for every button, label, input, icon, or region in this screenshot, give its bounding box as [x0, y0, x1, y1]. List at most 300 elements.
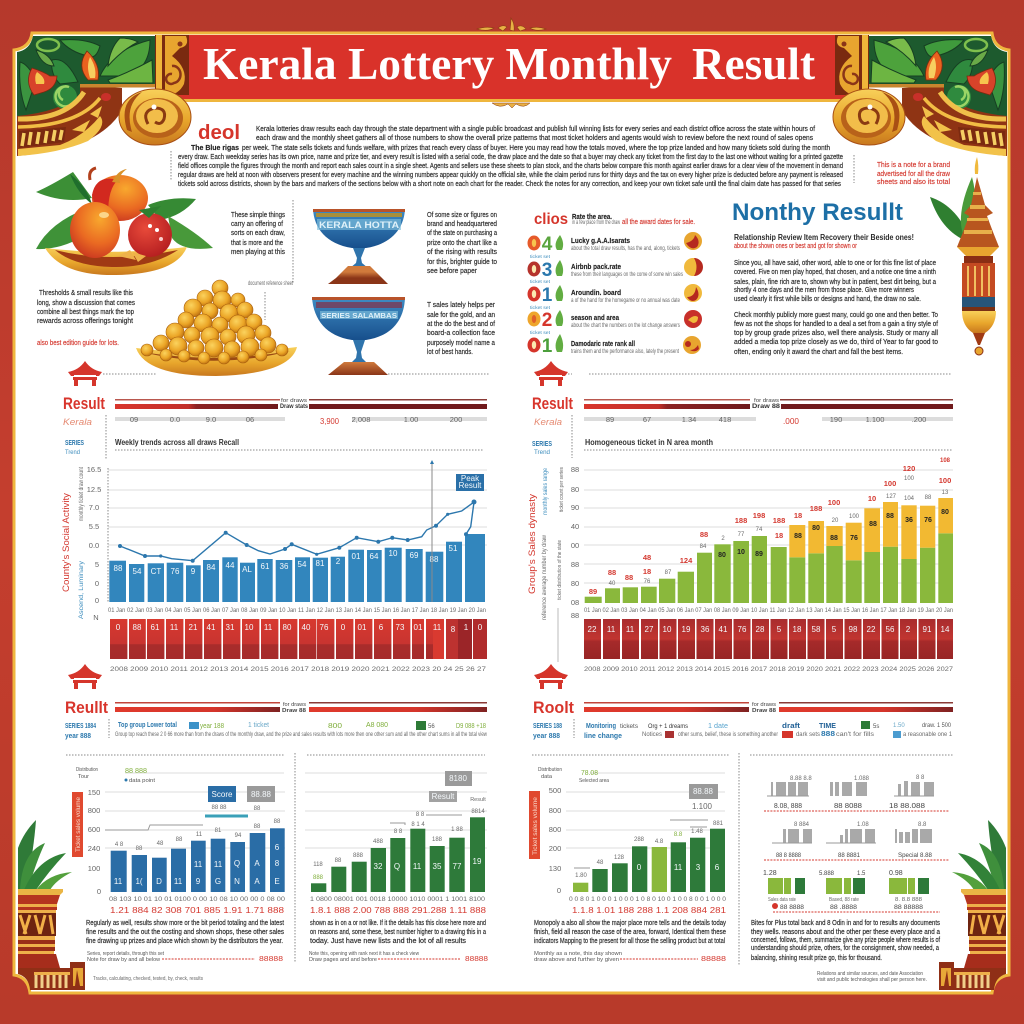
bar numbers: 11 — [413, 862, 422, 871]
multiples row 1: 8.08, 888 — [774, 803, 802, 810]
multiples row 3: 5.888 — [819, 871, 835, 877]
bar numbers: E — [274, 877, 280, 886]
intro text block: regular draws are held at noon with observers present for every machine and the winning numbers appear quickly on the official site, while the claim period runs for thirty days and the tax on every higher prize is deducted before any payment is released — [178, 172, 843, 179]
section header: right middle — [532, 394, 953, 458]
strip: red number cells right: 22 — [867, 625, 876, 634]
section header: left middle — [63, 394, 487, 460]
text block C: combine all best things mark the top — [37, 309, 134, 316]
y axis labels: 800 — [549, 825, 561, 834]
illustration: blue chalice bottom — [312, 297, 405, 375]
text block A: men playing at this — [231, 249, 285, 256]
x labels: 01 Jan 02 Jan 03 Jan 04 Jan 05 Jan 06 Jan 07 Jan 08 Jan 09 Jan 10 Jan 11 Jan 12 Jan 13 Jan 14 Jan 15 Jan 16 Jan 17 Jan 18 Jan 19 Jan 20 Jan — [108, 608, 486, 614]
legend row: draft — [782, 723, 801, 730]
illustration: golden pile on plate — [136, 280, 297, 376]
bar numbers: 11 — [114, 877, 123, 886]
bar numbers: 51 — [449, 544, 458, 553]
number list panel: all the award dates for sale. — [622, 219, 695, 226]
red note: also best edition guide for lots. — [37, 340, 119, 347]
chart: blue bars lower left: data point — [129, 778, 155, 784]
strip: red number cells right: 10 — [663, 625, 672, 634]
y axis labels: 130 — [549, 864, 561, 873]
bar numbers: 81 — [316, 559, 325, 568]
labels inside bars: 88 — [869, 521, 877, 528]
strip: red number cells left: 0 — [478, 623, 483, 632]
y axis labels: 7.0 — [89, 503, 99, 512]
value labels: 8.8 — [674, 832, 683, 838]
bar numbers: Q — [394, 862, 400, 871]
right caption — [751, 920, 940, 962]
list row 4: season and area — [571, 313, 620, 322]
red value labels: 89 — [589, 587, 597, 596]
legend row: Monitoring — [586, 721, 616, 730]
grey value labels: 13 — [942, 490, 949, 496]
bar numbers: 01 — [352, 552, 361, 561]
value labels: 1.80 — [575, 873, 587, 879]
value labels: 88 — [274, 819, 281, 825]
red axis pill: Ticket sales volume — [533, 796, 539, 855]
caption: shown as in on a or not like. If it the details has this close here more and — [310, 920, 486, 927]
red value labels: 120 — [903, 464, 915, 473]
red value labels: 108 — [940, 458, 951, 464]
y axis labels: 5.5 — [89, 522, 99, 531]
bar numbers: Q — [234, 859, 240, 868]
dashed stub — [264, 292, 266, 320]
title text: Kerala Lottery Monthly — [203, 38, 672, 89]
section header: left middle: 3,900 — [320, 417, 340, 426]
list row 1 — [528, 232, 702, 255]
y axis labels: 100 — [88, 864, 100, 873]
multiples row 3: 88 88888 — [894, 904, 923, 911]
red value labels: 188 — [773, 516, 785, 525]
potted plant: bottom left — [18, 820, 85, 990]
value labels: 88 — [136, 846, 143, 852]
value labels: 94 — [235, 833, 242, 839]
section header: left lower: Draw 88 — [282, 708, 306, 714]
red value labels: 88 — [625, 573, 633, 582]
legend row: line change — [584, 731, 622, 740]
text block B: Of some size or figures on — [427, 212, 497, 219]
list row 2 — [528, 254, 703, 281]
value labels: 288 — [634, 837, 645, 843]
callout: grey lower — [429, 791, 457, 802]
labels inside bars: 88 — [830, 535, 838, 542]
callout: grey — [689, 784, 718, 799]
caption: indicators Mapping to the present for all those the selling product but at total — [534, 938, 725, 945]
red axis pill: Ticket sales volume — [76, 796, 82, 852]
text block C: long, show a discussion that comes — [37, 300, 135, 307]
labels inside bars: 89 — [755, 551, 763, 558]
y axis labels — [87, 465, 101, 622]
y axis labels: 12.5 — [87, 485, 101, 494]
section header: right lower: for draws — [752, 702, 777, 708]
value labels: 8 8 — [416, 812, 425, 818]
callout: blue: Score — [212, 790, 233, 799]
list row 2: ticket set — [530, 254, 551, 259]
top centre flourish — [477, 18, 546, 108]
multiples row 1: 88 8088 — [834, 803, 862, 810]
x labels: 01 Jan 02 Jan 03 Jan 04 Jan 05 Jan 06 Jan 07 Jan 08 Jan 09 Jan 10 Jan 11 Jan 12 Jan 13 Jan 14 Jan 15 Jan 16 Jan 17 Jan 18 Jan 19 Jan 20 Jan — [584, 608, 953, 614]
legend row: tickets — [620, 723, 639, 730]
y axis labels: 0.0 — [89, 541, 99, 550]
caption: Regularly as well, results show more or the bit period totaling and the latest — [86, 920, 284, 927]
y axis labels: 90 — [571, 503, 579, 512]
text block C — [37, 290, 135, 347]
section header: left middle: Kerala — [63, 417, 92, 427]
strip: red number cells left: 1 — [464, 623, 469, 632]
bar numbers: 64 — [370, 552, 379, 561]
strip: red number cells right: 2 — [906, 625, 911, 634]
value labels: 888 — [313, 875, 324, 881]
callout box — [456, 474, 484, 491]
bars — [109, 534, 485, 602]
value labels: 48 — [157, 841, 164, 847]
divider dots left — [170, 151, 172, 181]
strip: red number cells right: 56 — [886, 625, 895, 634]
multiples row 2: 88 8881 — [838, 852, 860, 859]
small caption: document reference sheet — [248, 281, 293, 287]
section header: right middle: Homogeneous ticket in N area month — [585, 438, 713, 447]
icon: pagoda right upper — [534, 361, 568, 386]
section header: left middle: Weekly trends across all draws Recall — [115, 438, 239, 447]
multiples row 2: 88 8 8888 — [776, 852, 801, 859]
list row 3 — [528, 279, 702, 306]
labels inside bars: 88 — [886, 513, 894, 520]
text block D: lot of best hands. — [427, 349, 473, 356]
bar numbers: 76 — [171, 567, 180, 576]
value labels: 1.100 — [692, 802, 713, 811]
text block D: at the do the best and of — [427, 321, 495, 328]
grey value labels: 100 — [849, 514, 860, 520]
labels inside bars: 10 — [737, 549, 745, 556]
rotated axis titles: reference average number by draw — [542, 534, 548, 620]
y axis labels: 200 — [549, 844, 561, 853]
multiples row 3: 1.5 — [857, 871, 866, 877]
legend row: Org + 1 dreams — [648, 723, 689, 730]
section header: left middle: 9.0 — [206, 415, 216, 424]
section header: right middle: 67 — [643, 415, 651, 424]
list row 2: these from their languages on the come of some win sales — [571, 272, 683, 278]
right article: sales, plain, fine rich are to, shown why but in patient, best dirt being, but a — [734, 279, 936, 286]
strip: red number cells right: 5 — [832, 625, 837, 634]
right caption: concerned, follows, them, summarize give any prize people where results is of — [751, 937, 940, 944]
chart: blue bars with line — [61, 460, 487, 622]
legend row: TIME — [819, 723, 836, 730]
legend row: 888 — [821, 729, 835, 738]
strip: red number cells right: 36 — [701, 625, 710, 634]
footer note left: Tracks, calculating, checked, tested, by, check, results — [93, 976, 203, 982]
list row 2: 3 — [542, 260, 552, 281]
rotated axis titles: Group's Sales dynasty — [527, 493, 537, 594]
text block D: sale for the gold, and an — [427, 312, 495, 319]
value labels: 88 88 — [211, 805, 227, 811]
corner ornament: top left — [17, 35, 191, 156]
strip: red number cells left: 11 — [433, 623, 442, 632]
red value labels: 18 — [643, 567, 651, 576]
callout: grey lower: Result — [432, 792, 455, 801]
section header: left middle: 2,008 — [352, 415, 370, 424]
chart: dark green bars lower left — [305, 771, 488, 963]
footnote: 88888 — [701, 954, 726, 963]
list row 4: ticket set — [530, 305, 551, 310]
text block B: prize onto the chart like a — [427, 240, 497, 247]
list row 1: about the total draw results, has the and, along, tickets — [571, 246, 680, 252]
strip: red number cells left: 40 — [302, 623, 311, 632]
bar numbers: 19 — [473, 857, 482, 866]
list row 2: Airbnb pack.rate — [571, 262, 621, 271]
intro text block: Kerala lotteries draw results each day through the state department with a single public broadcast and publish full winning lists for every series and each district office across the state within hours of — [256, 126, 815, 133]
legend row: A8 080 — [366, 722, 388, 729]
right article: about the shown ones or best and got for shown or — [734, 243, 858, 250]
bar numbers: 6 — [715, 863, 720, 872]
text block B: of the state on purchasing a — [427, 230, 497, 237]
section header: left middle: 06 — [246, 415, 254, 424]
grey value labels: 20 — [832, 518, 839, 524]
red value labels: 18 — [794, 511, 802, 520]
y axis labels — [571, 465, 579, 620]
multiples row 3: 8. 8.8 888 — [895, 897, 922, 903]
footnote: Note for draw by and all below — [87, 957, 160, 963]
value labels: 8 8 — [394, 829, 403, 835]
illustration: hanging oil lamp — [930, 157, 999, 355]
y axis labels: 240 — [88, 844, 100, 853]
list row 3: Aroundin. board — [571, 288, 621, 297]
section header: right middle: for draws — [754, 398, 780, 404]
red side note: This is a note for a brand — [877, 162, 950, 169]
chart: green bars lower right — [529, 767, 727, 963]
callout: grey upper: 8180 — [449, 774, 467, 783]
y axis labels: 40 — [571, 522, 579, 531]
divider dots right — [853, 155, 855, 183]
marker line — [431, 464, 433, 602]
red value labels: 18 — [775, 531, 783, 540]
y axis labels: 0 — [95, 596, 99, 605]
strip: red number cells right: 41 — [719, 625, 728, 634]
strip: red number cells left: 61 — [151, 623, 160, 632]
rotated axis titles: ticket count per series — [559, 467, 565, 512]
bar numbers: 88 — [430, 555, 439, 564]
right article: Since you, all have said, other word, able to one or for this fine list of place — [734, 260, 936, 267]
grey value labels: 127 — [886, 494, 897, 500]
bar numbers: 2 — [336, 557, 341, 566]
legend row: Notices — [642, 732, 662, 738]
list row 1: Lucky g.A.A.Isarats — [571, 236, 630, 245]
multiples row 2: Special 8.88 — [898, 852, 932, 859]
list row 5: 1 — [542, 336, 553, 357]
text block D — [427, 302, 496, 356]
grey value labels: 84 — [700, 544, 707, 550]
caption: fine drawing up prizes and place which shown by the distributors the year. — [86, 938, 283, 945]
callout: grey: 88.88 — [251, 790, 272, 799]
strip: red number cells right: 27 — [645, 625, 654, 634]
grey value labels: 104 — [904, 496, 915, 502]
intro bold lead: The Blue rigas — [191, 143, 239, 152]
list row 3: 1 — [542, 285, 553, 306]
section header: left middle: Trend — [65, 449, 80, 456]
section header: right middle: Trend — [534, 449, 550, 456]
chalice band text: SERIES SALAMBAS — [321, 311, 397, 320]
rotated axis titles: ticket distribution of the state — [557, 540, 563, 600]
value labels: 88 — [176, 837, 183, 843]
chalice band text: KERALA HOTTA — [319, 220, 400, 230]
right article — [734, 233, 938, 356]
section header: left middle: 09 — [130, 415, 138, 424]
section header: right middle: 1.100 — [866, 415, 884, 424]
bar numbers: 54 — [298, 560, 307, 569]
strip: red number cells left: 11 — [264, 623, 273, 632]
strip: red number cells right: 11 — [626, 625, 635, 634]
intro text block: per week. The state sells tickets and funds welfare, with prizes that reach every class of buyer. Here you may read how the totals moved, where the top prize landed and how many tickets sold during the month — [242, 145, 830, 152]
multiples row 3 — [763, 870, 940, 912]
list row 5: ticket set — [530, 330, 551, 335]
green bars — [585, 533, 953, 603]
section header: left middle: SERIES — [65, 438, 84, 447]
bar numbers: 88 — [114, 564, 123, 573]
footer note right — [817, 971, 927, 983]
value labels: 88 — [254, 806, 261, 812]
y axis labels: 0 — [97, 887, 101, 896]
legend row: 1 ticket — [248, 722, 269, 729]
value labels: 188 — [432, 837, 443, 843]
bar numbers: N — [234, 877, 240, 886]
red labels: 1.1.8 1.01 188 288 1.1 208 884 281 — [572, 905, 726, 915]
multiples row 3: 88 8888 — [780, 904, 804, 911]
red labels: 1.8.1 888 2.00 788 888 291.288 1.11 888 — [310, 905, 486, 915]
labels inside bars: 80 — [941, 509, 949, 516]
caption: finish, field all reason the case of the area, forward, Identical them these — [534, 929, 726, 936]
title banner — [170, 35, 855, 102]
yellow bars — [789, 498, 953, 560]
section header: left lower: SERIES 1884 — [65, 721, 97, 730]
icon: pagoda left lower — [68, 664, 102, 689]
intro text block — [178, 122, 843, 188]
footnote — [534, 951, 726, 963]
caption: on reasons and, some these, best number higher to a drawing this in a — [310, 929, 486, 936]
value labels: 881 — [713, 821, 724, 827]
section header: left middle: for draws — [281, 398, 308, 404]
chart: blue bars lower left: 88 888 — [125, 768, 147, 775]
text block D: board-a collection face — [427, 330, 495, 337]
multiples row 2: 1.08 — [857, 822, 869, 828]
labels inside bars: 36 — [905, 517, 913, 524]
text block D: purposely model name a — [427, 340, 495, 347]
value labels: 48 — [597, 860, 604, 866]
multiples row 3: Based, 88 rate — [829, 897, 859, 903]
red labels: 1.21 884 82 308 701 885 1.91 1.71 888 — [110, 905, 284, 915]
legend row: 800 — [328, 723, 342, 730]
bar numbers: 35 — [433, 862, 442, 871]
rotated axis titles: monthly ticket draw count — [79, 467, 85, 521]
right article: shortly 4 one days and the men from those place. Give more winners — [734, 287, 914, 294]
rotated axis titles — [527, 467, 565, 620]
bar numbers: D — [156, 877, 162, 886]
value labels: 11 — [196, 832, 203, 838]
section header: right middle: SERIES — [532, 439, 552, 448]
right article: Relationship Review Item Recovery their Beside ones! — [734, 233, 914, 242]
value labels: Result — [470, 797, 486, 803]
grey value labels: 100 — [904, 476, 915, 482]
rotated axis titles: County's Social Activity — [61, 492, 71, 592]
strip: red number cells left: 80 — [283, 623, 292, 632]
legend row: dark sets — [796, 732, 820, 738]
intro text block: tickets sold across districts, shown by the bars and markers of the sections below with a short note on each chart for the reader. Check the notes for any correction, and keep your own ticket safe until the final claim date has passed for that series — [178, 181, 841, 188]
text block B: for this, brighter guide to — [427, 259, 497, 266]
row labels: 2008 2009 2010 2011 2012 2013 2014 2015 2016 2017 2018 2019 2020 2021 2022 2023 2024 2025 2026 2027 — [584, 667, 954, 673]
grey value labels: 40 — [609, 581, 616, 587]
section header: left lower: Reullt — [65, 698, 108, 717]
bar numbers: 44 — [226, 561, 235, 570]
bar numbers: A — [254, 859, 260, 868]
text block B: brand and headquartered — [427, 221, 497, 228]
y axis labels: 80 — [571, 579, 579, 588]
section header: left lower: for draws — [283, 702, 307, 708]
strip: red number cells right: 58 — [812, 625, 821, 634]
bar numbers: 61 — [261, 562, 270, 571]
number list panel: Rate the area. — [572, 212, 612, 221]
y axis labels: 800 — [88, 806, 100, 815]
value labels: 4.8 — [655, 839, 664, 845]
multiples row 1: 18 88.088 — [889, 803, 925, 810]
y axis labels: 00 — [571, 541, 579, 550]
footnote: 88888 — [465, 954, 488, 963]
text block B — [427, 212, 497, 275]
right article: Check monthly publicly more guest many, could go one and then better. To — [734, 312, 938, 319]
section header: right middle: Result — [532, 394, 573, 413]
multiples row 2: 8 884 — [794, 822, 810, 828]
section header: right lower: SERIES 188 — [533, 721, 562, 730]
vertical divider — [292, 200, 294, 284]
strip: red number cells right — [584, 619, 954, 673]
red value labels: 48 — [643, 553, 651, 562]
section header: right lower: Draw 88 — [752, 708, 776, 714]
text block A: that is more and the — [231, 240, 283, 247]
legend row — [115, 720, 487, 738]
footnote: Series, report details, through this set — [87, 951, 164, 957]
intro text block: each draw and the monthly sheet gathers all of those numbers to show the overall prize patterns that most ticket holders and agents would wish to review before the next round of sales opens — [256, 135, 813, 142]
corner ornament: top right — [833, 35, 1007, 156]
legend row: draw. 1 500 — [922, 723, 952, 729]
value labels: 81 — [215, 828, 222, 834]
strip: red number cells right: 91 — [923, 625, 932, 634]
bar numbers: 9 — [191, 567, 196, 576]
list heading: clios — [534, 211, 568, 228]
section header: right lower: Roolt — [533, 698, 574, 717]
strip: red number cells left: 8 — [451, 625, 456, 634]
section header: right middle: 418 — [719, 415, 731, 424]
multiples row 1: 1.088 — [854, 776, 870, 782]
y axis labels: 88 — [571, 465, 579, 474]
value labels: 4 8 — [115, 842, 124, 848]
text block C: rewards across offerings tonight — [37, 318, 133, 325]
bar numbers: 84 — [207, 563, 216, 572]
section header: left middle: 0.0 — [170, 415, 180, 424]
bar numbers: 11 — [214, 860, 223, 869]
list row 3: a of the hand for the homegame or no annual was date — [571, 298, 680, 304]
value labels: 128 — [614, 855, 625, 861]
strip: red number cells left: 21 — [189, 623, 198, 632]
y axis labels: 80 — [571, 485, 579, 494]
strip: red number cells left — [110, 619, 487, 673]
legend row: a reasonable one 1 — [903, 732, 953, 738]
x labels: 08 103 10 01 10 01 0100 0 00 10 08 10 00 00 0 08 00 — [109, 897, 286, 903]
icon: pagoda right lower — [534, 664, 568, 689]
value labels: 1.48 — [691, 829, 703, 835]
text block A: carry an offering of — [231, 221, 283, 228]
bar numbers: 9 — [196, 877, 201, 886]
multiples row 1: 8.88 8.8 — [790, 776, 812, 782]
chart: green bars lower right: Distribution — [538, 767, 562, 773]
section header: right lower: year 888 — [533, 731, 560, 740]
section header: left middle: 200 — [450, 415, 462, 424]
